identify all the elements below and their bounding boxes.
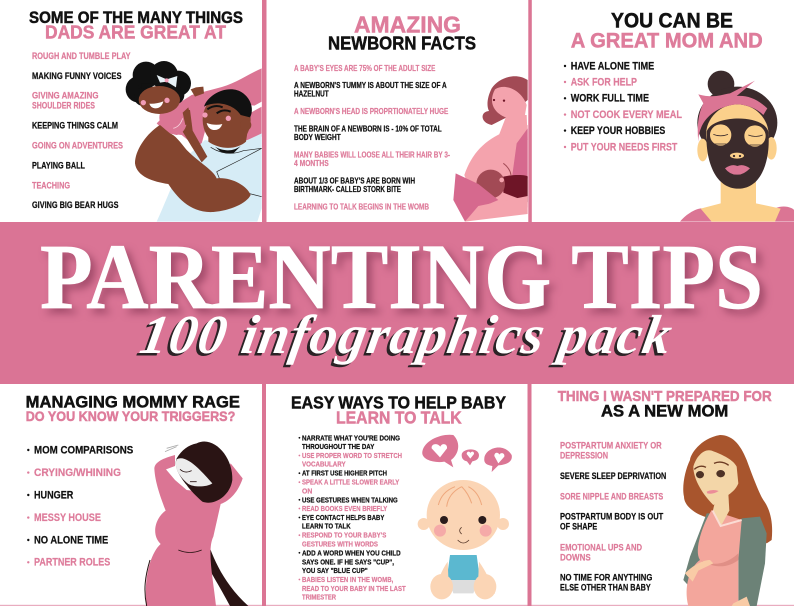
list <box>560 440 667 593</box>
list: A NEWBORN'S TUMMY IS ABOUT THE SIZE OF A <box>294 80 447 90</box>
list: BODY WEIGHT <box>294 132 341 142</box>
list: THE BRAIN OF A NEWBORN IS - 10% OF TOTAL <box>294 123 442 133</box>
list: GESTURES WITH WORDS <box>302 540 378 549</box>
list: HAVE ALONE TIME <box>571 60 654 72</box>
heading: MANAGING MOMMY RAGE <box>26 393 240 411</box>
list <box>32 51 131 210</box>
list: BIRTHMARK- CALLED STORK BITE <box>294 184 401 194</box>
list: BABIES LISTEN IN THE WOMB, <box>302 575 393 584</box>
list: KEEPING THINGS CALM <box>32 121 118 131</box>
list: EYE CONTACT HELPS BABY <box>302 513 384 522</box>
list: LEARN TO TALK <box>302 522 351 531</box>
list: SPEAK A LITTLE SLOWER EARLY <box>302 478 399 487</box>
subtitle: 100 infographics pack <box>136 304 677 365</box>
list: POSTPARTUM ANXIETY OR <box>560 440 662 450</box>
list: WORK FULL TIME <box>571 93 649 105</box>
heading: A GREAT MOM AND <box>571 29 763 52</box>
heading <box>291 392 506 427</box>
heading: AMAZING <box>354 11 461 37</box>
list: NOT COOK EVERY MEAL <box>571 109 682 121</box>
illustration: dad lifting daughter <box>126 61 262 222</box>
list: MANY BABIES WILL LOOSE ALL THEIR HAIR BY 3- <box>294 149 450 159</box>
list: A NEWBORN'S HEAD IS PROPRTIONATELY HUGE <box>294 106 449 116</box>
panel: mommy rage <box>26 393 248 606</box>
panel: not prepared as a new mom <box>558 388 772 606</box>
list: USE PROPER WORD TO STRETCH <box>302 451 402 460</box>
list: NARRATE WHAT YOU'RE DOING <box>302 433 400 442</box>
list: EMOTIONAL UPS AND <box>560 542 642 552</box>
list <box>298 433 406 602</box>
list: OF SHAPE <box>560 522 597 532</box>
heading: DO YOU KNOW YOUR TRIGGERS? <box>26 409 235 424</box>
list: TEACHING <box>32 180 70 190</box>
heading <box>26 393 240 424</box>
list: KEEP YOUR HOBBIES <box>571 125 665 137</box>
panel: help baby learn to talk <box>291 392 512 602</box>
list: SORE NIPPLE AND BREASTS <box>560 491 663 501</box>
list: RESPOND TO YOUR BABY'S <box>302 531 386 540</box>
illustration: pregnant woman holding head <box>145 442 248 606</box>
illustration: mother nursing baby <box>453 76 528 222</box>
panel: you can be a great mom <box>564 10 794 222</box>
list: ON <box>302 486 312 495</box>
heading: SOME OF THE MANY THINGS <box>29 8 243 27</box>
list: ADD A WORD WHEN YOU CHILD <box>302 548 401 557</box>
list: MAKING FUNNY VOICES <box>32 71 122 81</box>
list: THROUGHOUT THE DAY <box>302 442 374 451</box>
heading: EASY WAYS TO HELP BABY <box>291 392 506 412</box>
list: PUT YOUR NEEDS FIRST <box>571 141 678 153</box>
heading: YOU CAN BE <box>611 10 733 33</box>
list: AT FIRST USE HIGHER PITCH <box>302 469 387 478</box>
list: ABOUT 1/3 OF BABY'S ARE BORN WIH <box>294 175 415 185</box>
list: DEPRESSION <box>560 451 608 461</box>
list <box>564 60 682 153</box>
list <box>27 444 133 569</box>
list: GOING ON ADVENTURES <box>32 140 123 150</box>
list: YOU SAY "BLUE CUP" <box>302 566 368 575</box>
list: MESSY HOUSE <box>34 512 101 524</box>
list: TRIMESTER <box>302 593 336 602</box>
list: LEARNING TO TALK BEGINS IN THE WOMB <box>294 201 429 211</box>
list: 4 MONTHS <box>294 158 329 168</box>
list: NO TIME FOR ANYTHING <box>560 573 652 583</box>
list: NO ALONE TIME <box>34 534 108 546</box>
illustration: baby with heart bubbles <box>418 435 512 599</box>
list: A BABY'S EYES ARE 75% OF THE ADULT SIZE <box>294 63 436 73</box>
list: GIVING BIG BEAR HUGS <box>32 200 118 210</box>
panel: newborn facts <box>294 11 528 222</box>
heading: DADS ARE GREAT AT <box>45 21 227 42</box>
list: PARTNER ROLES <box>34 557 110 569</box>
heading: AS A NEW MOM <box>601 403 728 421</box>
list: USE GESTURES WHEN TALKING <box>302 495 398 504</box>
heading: NEWBORN FACTS <box>328 32 476 53</box>
illustration: woman with face mask <box>680 71 794 222</box>
list: ROUGH AND TUMBLE PLAY <box>32 51 131 61</box>
list: READ TO YOUR BABY IN THE LAST <box>302 584 406 593</box>
heading: LEARN TO TALK <box>336 407 462 427</box>
heading <box>558 388 772 421</box>
heading <box>571 10 763 52</box>
list: ASK FOR HELP <box>571 76 637 88</box>
list: PLAYING BALL <box>32 160 85 170</box>
list: GIVING AMAZING <box>32 91 98 101</box>
heading <box>328 11 476 53</box>
panel: dads are great at <box>29 8 262 222</box>
list: CRYING/WHINING <box>34 467 121 479</box>
banner <box>0 222 794 384</box>
list: SHOULDER RIDES <box>32 101 95 111</box>
list: READ BOOKS EVEN BRIEFLY <box>302 504 387 513</box>
list: ELSE OTHER THAN BABY <box>560 583 651 593</box>
list <box>294 63 450 211</box>
list: MOM COMPARISONS <box>34 444 133 456</box>
list: SEVERE SLEEP DEPRIVATION <box>560 471 667 481</box>
list: DOWNS <box>560 552 591 562</box>
list: SAYS ONE. IF HE SAYS "CUP", <box>302 557 394 566</box>
list: VOCABULARY <box>302 460 346 469</box>
list: POSTPARTUM BODY IS OUT <box>560 512 664 522</box>
heading: THING I WASN'T PREPARED FOR <box>558 388 772 405</box>
list: HUNGER <box>34 489 73 501</box>
illustration: worried pregnant mom <box>683 435 772 606</box>
list: HAZELNUT <box>294 89 329 99</box>
heading <box>29 8 243 42</box>
subtitle: 100 infographics pack <box>133 307 674 367</box>
